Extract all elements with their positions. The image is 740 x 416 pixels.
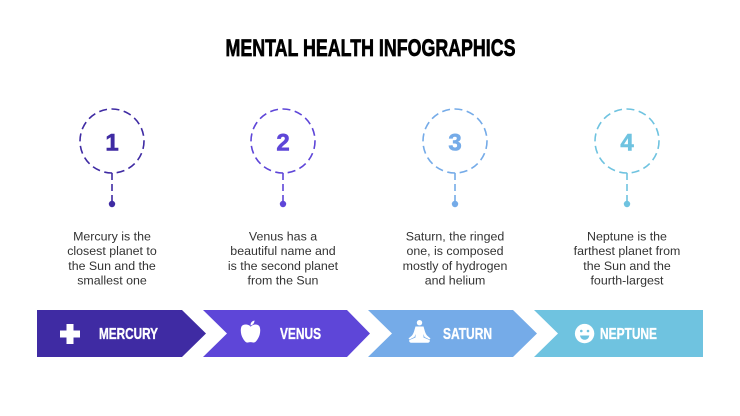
text: neptune description: farthest planet from	[574, 244, 680, 258]
text: venus description: is the second planet	[228, 259, 339, 273]
icon: smiley	[575, 324, 594, 343]
marker 4	[595, 109, 659, 207]
marker 2: 2	[276, 130, 290, 156]
text: saturn description: one, is composed	[406, 244, 504, 258]
text: mercury description: the Sun and the	[68, 259, 156, 273]
text: neptune description: the Sun and the	[583, 259, 671, 273]
icon: cross	[60, 324, 80, 344]
icon: apple	[241, 320, 260, 343]
text: mercury description: Mercury is the	[73, 230, 151, 244]
text: saturn description	[403, 230, 507, 288]
text: venus description: beautiful name and	[230, 244, 336, 258]
text: venus description: from the Sun	[248, 274, 319, 288]
text: neptune description: fourth-largest	[590, 274, 664, 288]
text: saturn description: and helium	[425, 274, 485, 288]
marker 1: 1	[105, 130, 119, 156]
icon: meditating figure	[408, 320, 430, 343]
marker 3: 3	[448, 130, 462, 156]
text: venus description	[228, 230, 339, 288]
text: mercury description: smallest one	[77, 274, 147, 288]
marker 3	[423, 109, 487, 207]
text: neptune description: Neptune is the	[587, 230, 667, 244]
arrow: neptune	[534, 310, 703, 357]
arrow: venus	[203, 310, 370, 357]
title: MENTAL HEALTH INFOGRAPHICS	[226, 35, 516, 62]
marker 2	[251, 109, 315, 207]
arrow: neptune: NEPTUNE	[600, 326, 657, 343]
arrow: mercury	[37, 310, 206, 357]
text: neptune description	[574, 230, 680, 288]
text: mercury description: closest planet to	[67, 244, 157, 258]
arrow: venus: VENUS	[280, 326, 321, 343]
text: saturn description: mostly of hydrogen	[403, 259, 507, 273]
text: saturn description: Saturn, the ringed	[406, 230, 504, 244]
arrow: mercury: MERCURY	[99, 326, 158, 343]
arrow: saturn: SATURN	[443, 326, 492, 343]
arrow: saturn	[368, 310, 537, 357]
marker 1	[80, 109, 144, 207]
marker 4: 4	[620, 130, 634, 156]
text: venus description: Venus has a	[249, 230, 317, 244]
text: mercury description	[67, 230, 157, 288]
